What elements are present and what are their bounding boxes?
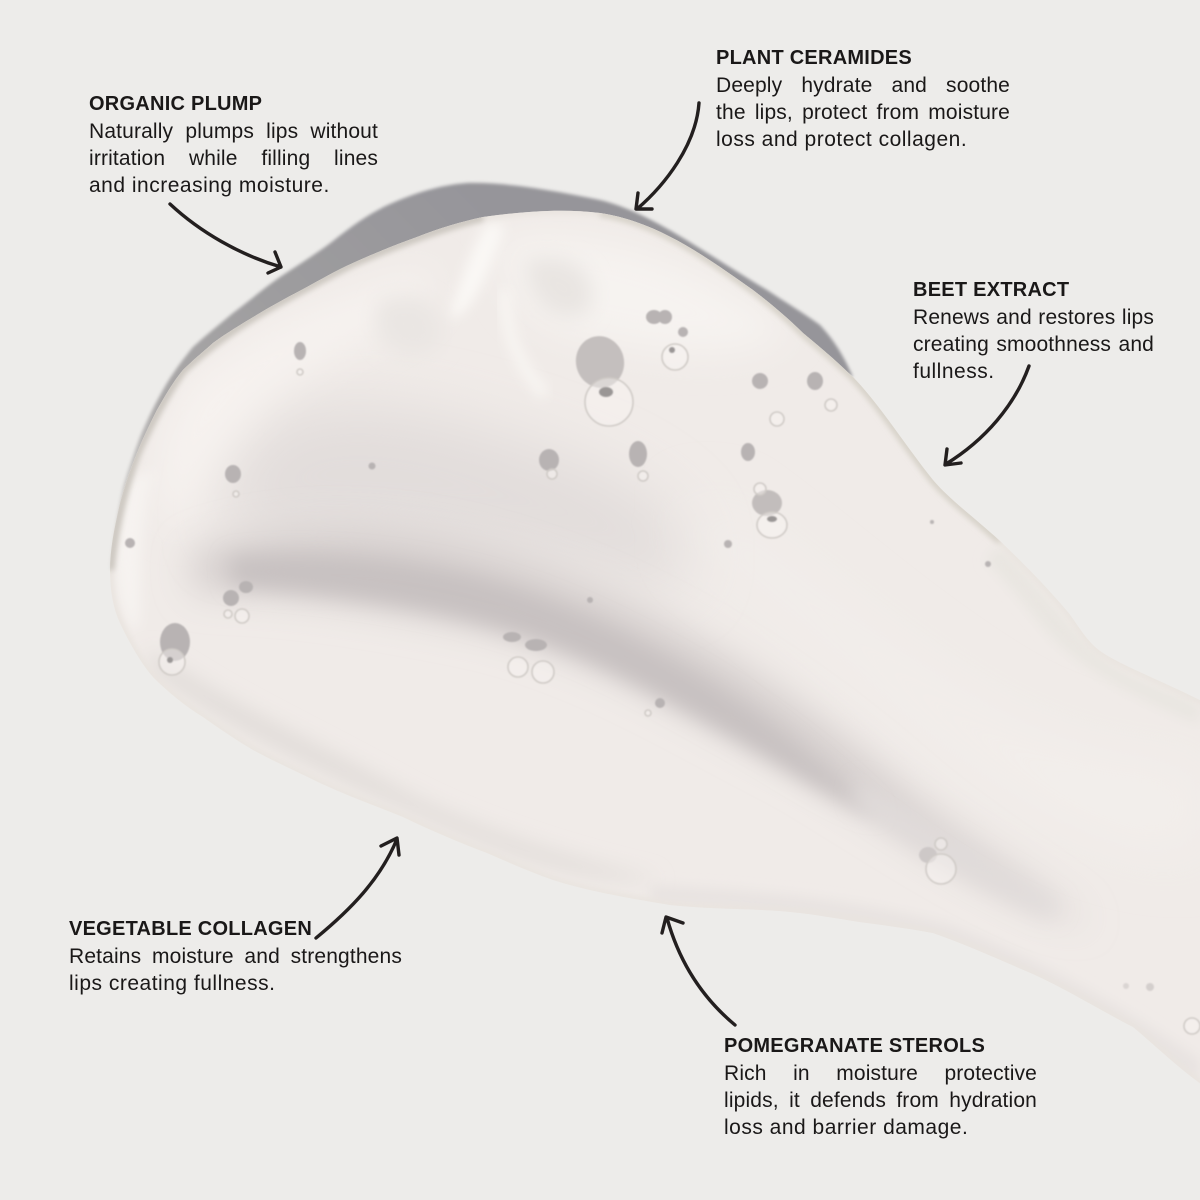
cast shadow above the gel [110, 183, 853, 570]
bubbles [125, 310, 1154, 991]
gel body [110, 210, 1200, 1083]
text: plant ceramides: Deeply hydrate and soothe [716, 74, 1010, 97]
text: plant ceramides: loss and protect collagen. [716, 128, 967, 151]
text: beet extract: creating smoothness and [913, 333, 1154, 356]
text: vegetable collagen: lips creating fullness. [69, 972, 275, 995]
text: beet extract: Renews and restores lips [913, 306, 1154, 329]
soft highlights and folds [158, 226, 1062, 920]
main diagonal fold, dark core [230, 554, 880, 815]
lower edge inner band [158, 669, 566, 864]
text: vegetable collagen: VEGETABLE COLLAGEN [69, 918, 312, 940]
fold tail [855, 780, 1060, 918]
text: plant ceramides: PLANT CERAMIDES [716, 47, 912, 69]
upper right edge tint [985, 545, 1200, 725]
text: organic plump: ORGANIC PLUMP [89, 93, 262, 115]
text: vegetable collagen: Retains moisture and strengthens [69, 945, 402, 968]
main diagonal fold, wide soft halo [187, 525, 1018, 872]
text: pomegranate sterols: loss and barrier damage. [724, 1116, 968, 1139]
text: organic plump: Naturally plumps lips without [89, 120, 378, 143]
arrow: beet extract [945, 366, 1029, 465]
text: organic plump: and increasing moisture. [89, 174, 330, 197]
text: pomegranate sterols: Rich in moisture protective [724, 1062, 1037, 1085]
text: vegetable collagen [69, 918, 402, 995]
arrow: vegetable collagen [316, 838, 399, 938]
arrow: pomegranate sterols [662, 917, 735, 1025]
text: pomegranate sterols: lipids, it defends from hydration [724, 1089, 1037, 1112]
text: organic plump [89, 93, 378, 197]
arrow: plant ceramides [636, 103, 699, 209]
text: pomegranate sterols: POMEGRANATE STEROLS [724, 1035, 985, 1057]
text: plant ceramides: the lips, protect from moisture [716, 101, 1010, 124]
text: organic plump: irritation while filling lines [89, 147, 378, 170]
text: plant ceramides [716, 47, 1010, 151]
text: pomegranate sterols [724, 1035, 1037, 1139]
text: beet extract: fullness. [913, 360, 995, 383]
gel swatch illustration [110, 181, 1200, 1083]
text: beet extract [913, 279, 1154, 383]
gel rim [110, 210, 846, 589]
text: beet extract: BEET EXTRACT [913, 279, 1069, 301]
